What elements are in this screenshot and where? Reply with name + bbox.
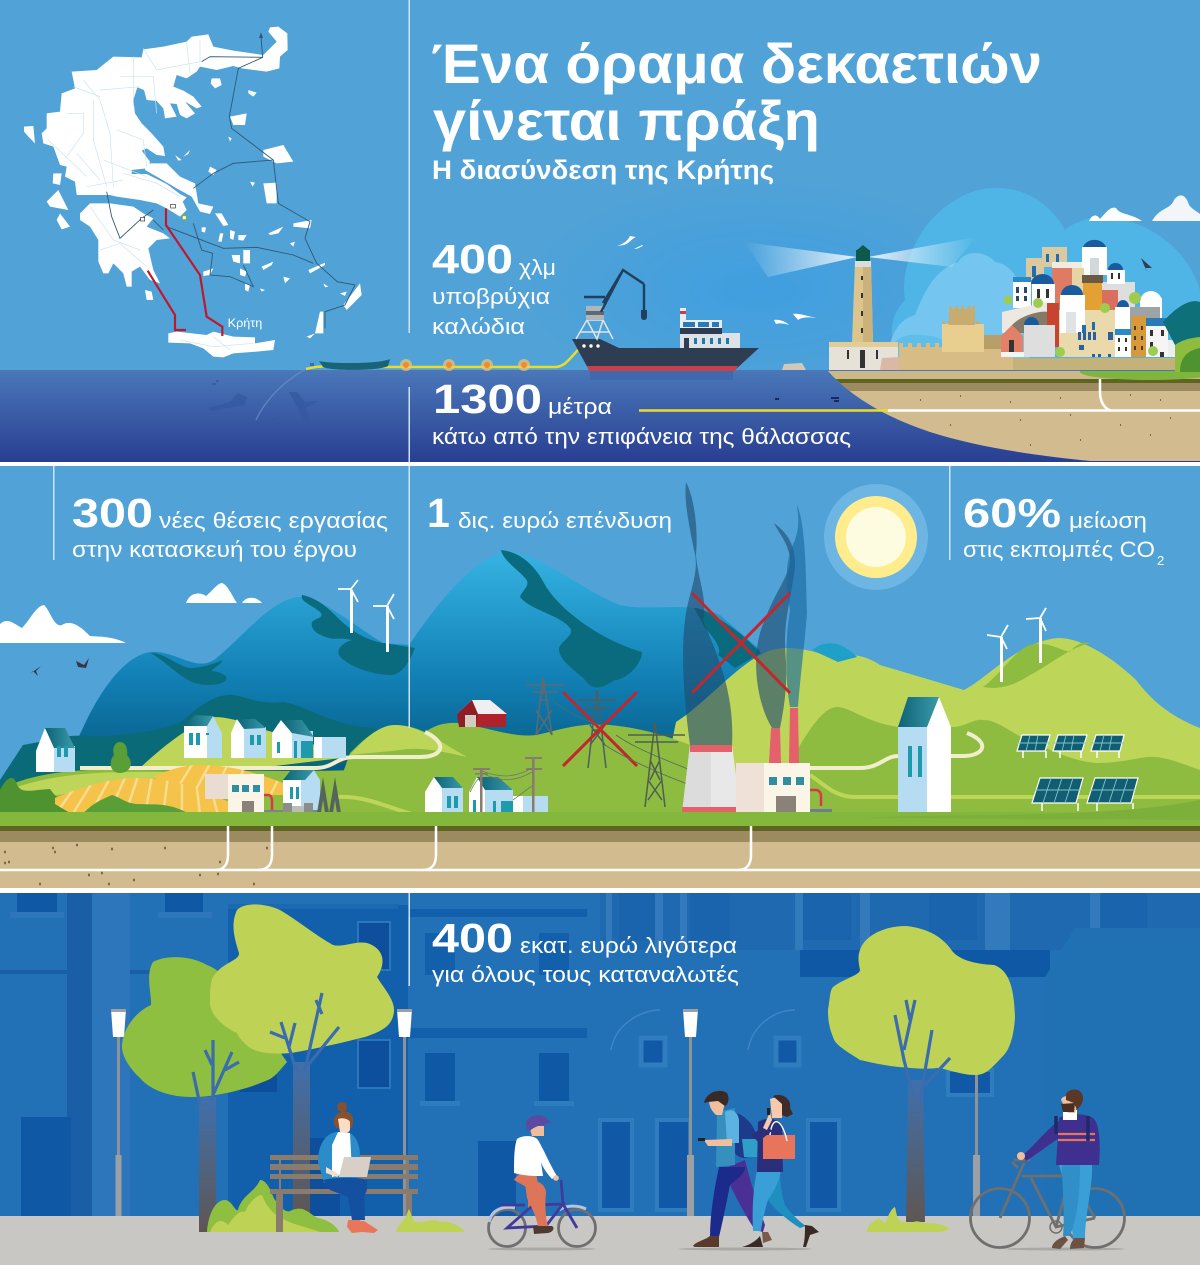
house hill: [142, 717, 350, 775]
hills right light green: [660, 638, 1200, 826]
buoys: [400, 359, 530, 371]
wind turbines right: [987, 608, 1046, 682]
house with annex centre: [469, 777, 548, 819]
sun: [824, 484, 928, 590]
stat: 300 jobs: [72, 490, 388, 562]
houses centre: [425, 777, 463, 819]
lamp post behind tree: [973, 1073, 980, 1216]
building backdrop centre: [228, 904, 408, 1216]
wind turbines left: [338, 580, 394, 652]
house: [36, 728, 75, 772]
big mountains: [60, 552, 760, 780]
mountain shadows: [151, 550, 761, 688]
title: Η διασύνδεση της Κρήτης: [432, 155, 774, 185]
stat: 400 km cables: 400: [432, 236, 513, 282]
teal foothills: [0, 695, 430, 795]
foreground right green: [760, 707, 1200, 826]
plant at tree 3: [867, 1207, 949, 1232]
stat: 400 km cables: υποβρύχια: [432, 284, 550, 309]
cable-laying ship: [572, 270, 759, 380]
stat: 1 billion investment: 1: [427, 490, 450, 536]
swallow: [1141, 258, 1152, 272]
right edge hills: [1163, 301, 1200, 372]
map of Greece: [24, 27, 362, 357]
label Crete: Κρήτη: [228, 317, 262, 330]
stat: 1300 metres: 1300: [433, 376, 542, 422]
title: Ένα όραμα δεκαετιών: [431, 32, 1042, 95]
title: γίνεται πράξη: [433, 89, 820, 152]
house: [231, 719, 266, 758]
rock: [782, 363, 806, 370]
bench: [270, 1155, 418, 1232]
building backdrop right: [600, 893, 1200, 1216]
stat: 400 million: [432, 915, 739, 987]
stat: 400 million: 400: [432, 915, 513, 961]
house on farm: [283, 770, 320, 813]
couple walking: [678, 1091, 819, 1250]
seagulls: [617, 236, 817, 325]
street lamp: [397, 1009, 412, 1216]
dividers: [53, 466, 950, 728]
left meadow: [0, 770, 360, 826]
cream roads: [80, 732, 982, 768]
cables in soil: [0, 826, 1200, 870]
yellow cable from barge to ship: [306, 350, 578, 369]
pylon: [526, 677, 565, 735]
woman with laptop: [318, 1102, 378, 1233]
new Crete link: [148, 208, 222, 336]
sea birds: [775, 397, 839, 402]
seabed land: [828, 364, 1200, 461]
utility poles: [470, 757, 542, 819]
cyclist boy: [488, 1115, 596, 1250]
soil layers: [0, 800, 1200, 888]
stat: 1 billion investment: δις. ευρώ επένδυση: [458, 508, 672, 533]
stat: 400 million: για όλους τους καταναλωτές: [432, 962, 739, 987]
smoke plumes: [683, 482, 807, 745]
bush: [82, 795, 191, 815]
title: [431, 32, 1042, 185]
street lamp: [111, 1009, 126, 1216]
grid lines on map: [48, 40, 253, 350]
cream hill: [350, 725, 467, 757]
Greek island town: [1001, 240, 1175, 357]
solar panels: [1017, 735, 1138, 811]
stat: 1 billion investment: [427, 490, 672, 536]
farm field back: [153, 765, 283, 795]
castle and town walls: [899, 306, 1176, 370]
house with annex: [272, 720, 346, 758]
existing subsea links: [107, 37, 355, 328]
large red cross over smoke: [692, 593, 790, 693]
man with bicycle: [970, 1089, 1125, 1250]
white band: [0, 888, 1200, 893]
tree 3: [828, 926, 1015, 1222]
clouds: [0, 583, 262, 643]
mainland and islands: [24, 27, 362, 357]
small blue hill: [812, 643, 857, 662]
man with backpack: [693, 1091, 772, 1247]
bush near bench: [396, 1209, 465, 1232]
bicycle: [970, 1160, 1124, 1248]
stat: 60% CO2: μείωση: [1069, 508, 1147, 533]
building backdrop right of centre: [408, 909, 587, 1216]
house: [184, 715, 222, 758]
pylon crossed out: [563, 690, 637, 768]
stat: 60% CO2: 60%: [963, 490, 1061, 536]
panel: submarine interconnection: [0, 0, 1200, 462]
farm building: [205, 774, 319, 813]
left shrubs: [0, 778, 90, 813]
background clouds behind town: [885, 188, 1200, 370]
panel: city street: [0, 893, 1200, 1265]
barn: [457, 700, 507, 727]
light ray: [256, 369, 306, 420]
bushes under bench: [207, 1180, 339, 1232]
top-right clouds: [1089, 195, 1200, 221]
stat: 60% CO2: 2: [1157, 553, 1164, 568]
stat: 300 jobs: στην κατασκευή του έργου: [72, 537, 357, 562]
barge: [319, 359, 390, 370]
ground: [0, 1216, 1200, 1265]
pylon: [628, 722, 685, 807]
panel: energy landscape: [0, 466, 1200, 888]
building backdrop left: [0, 893, 212, 1216]
power cable across seabed: [639, 379, 1200, 410]
stat: 60% CO2: [963, 490, 1164, 568]
divers: [207, 363, 362, 425]
transmission wires: [552, 700, 690, 785]
substations: [283, 777, 341, 813]
tree 1: [122, 957, 287, 1232]
stat: 400 million: εκατ. ευρώ λιγότερα: [520, 933, 737, 958]
tree 2: [210, 904, 394, 1216]
stat: 300 jobs: 300: [72, 490, 153, 536]
divider: [408, 893, 410, 986]
lighthouse: [829, 245, 930, 370]
tall building: [898, 697, 951, 818]
stat: 1300 metres: [432, 376, 851, 449]
hill darker behind windmills: [983, 642, 1090, 688]
stat: 400 km cables: χλμ: [519, 255, 556, 280]
white band: [0, 462, 1200, 466]
stat: 1300 metres: μέτρα: [548, 394, 612, 419]
power plant: [682, 708, 832, 813]
street lamp: [683, 1009, 698, 1216]
birds: [31, 658, 89, 676]
stat: 60% CO2: στις εκπομπές CO: [963, 537, 1155, 562]
stat: 1300 metres: κάτω από την επιφάνεια της θάλασσας: [432, 424, 851, 449]
central green hills: [344, 723, 700, 826]
stat dividers: [408, 0, 410, 462]
stat: 300 jobs: νέες θέσεις εργασίας: [159, 508, 388, 533]
man figure: [1017, 1089, 1100, 1249]
stat: 400 km cables: [432, 236, 556, 339]
tree: [111, 742, 131, 773]
lighthouse beams: [744, 237, 976, 277]
farm field front: [55, 778, 228, 812]
stat: 400 km cables: καλώδια: [432, 314, 525, 339]
woman with phone and bag: [742, 1095, 819, 1247]
lower pale green road: [337, 775, 1200, 817]
